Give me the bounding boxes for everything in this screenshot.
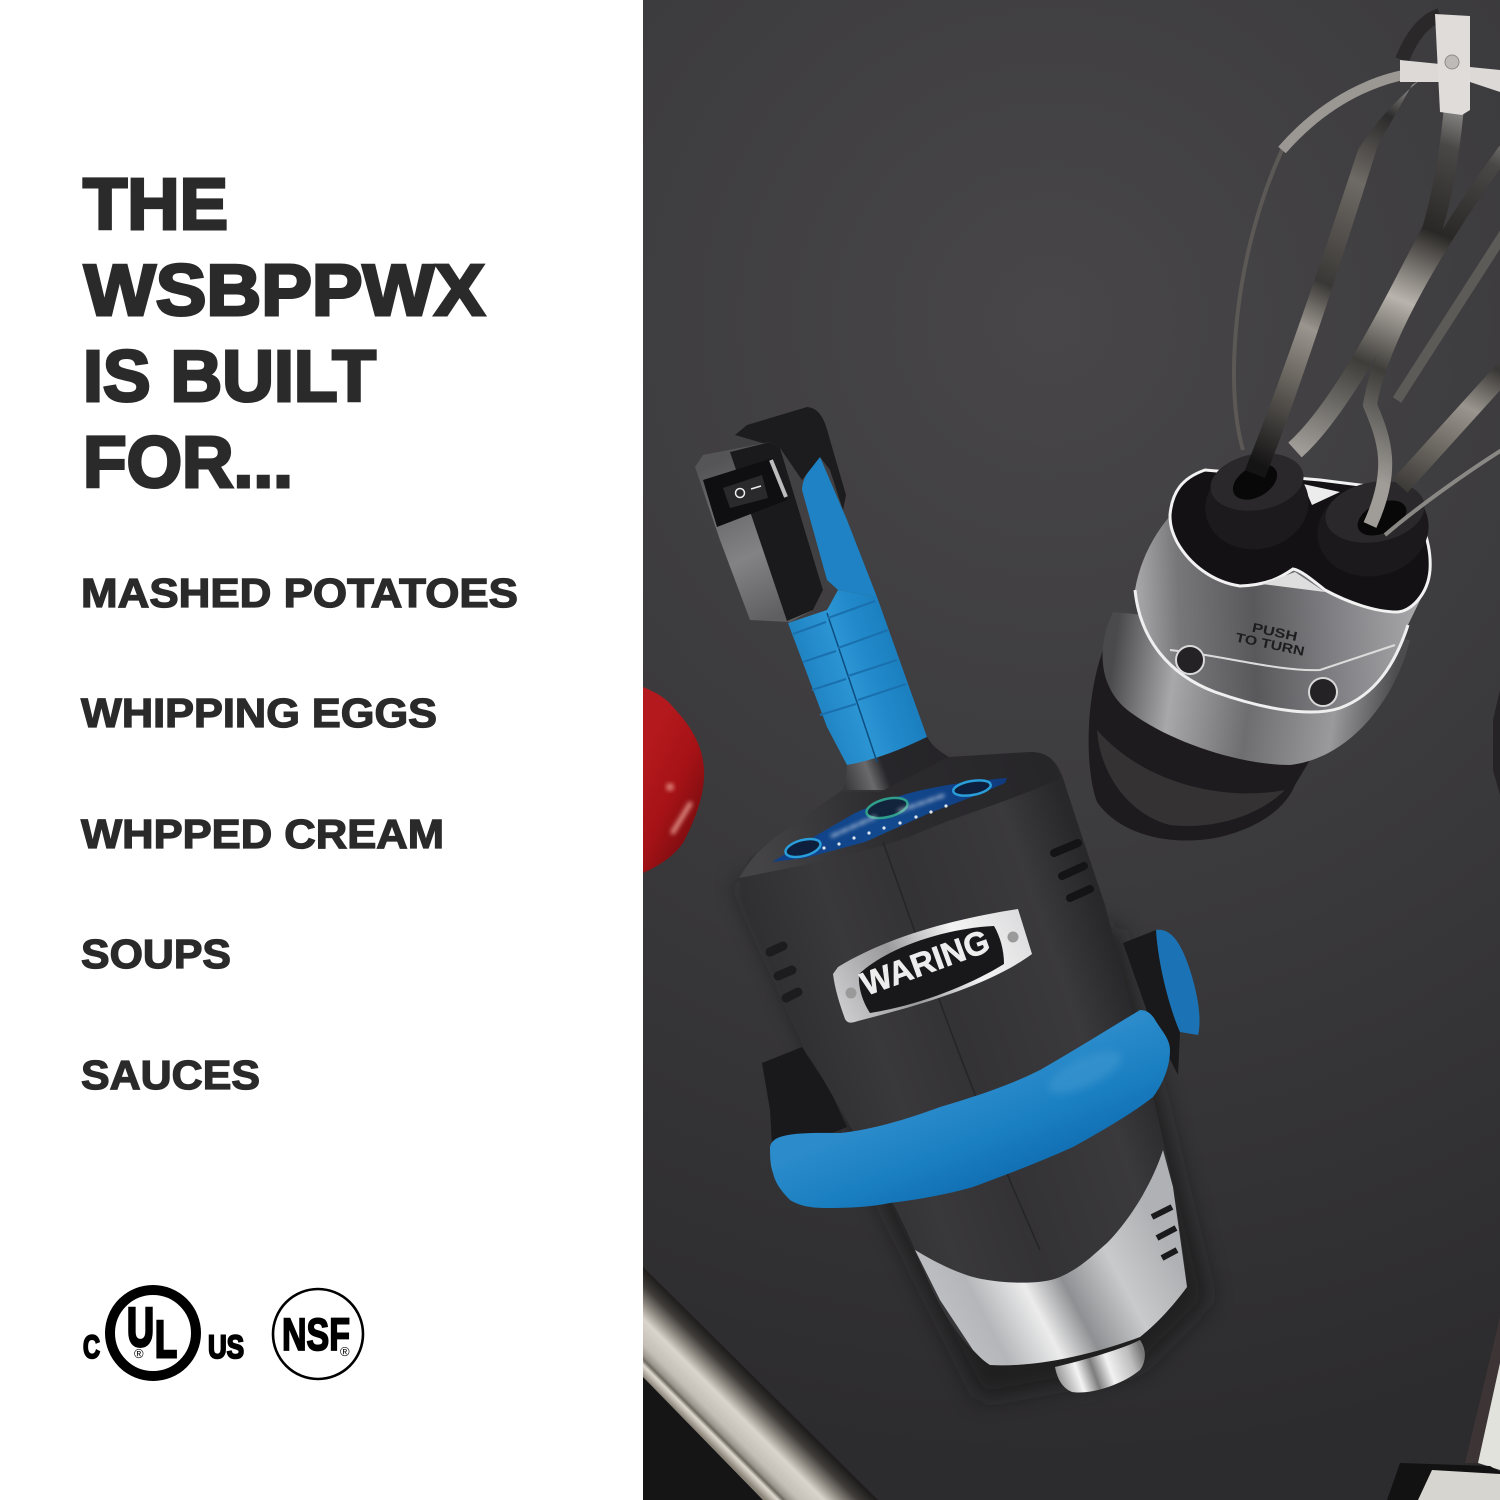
icon: cULus certification mark: U — [127, 1296, 154, 1358]
handle grip — [788, 457, 927, 765]
switch housing — [695, 442, 823, 622]
chrome ring — [1103, 612, 1410, 765]
name badge — [833, 909, 1032, 1023]
title — [83, 165, 485, 503]
list of uses: WHPPED CREAM — [81, 811, 444, 857]
control label — [772, 778, 1007, 862]
blue knob — [1156, 930, 1200, 1035]
title: IS BUILT — [83, 337, 376, 417]
icon: cULus certification mark: L — [155, 1311, 177, 1369]
title: THE — [83, 165, 228, 245]
whisk attachment — [1089, 14, 1500, 840]
bracket: left — [762, 1047, 847, 1150]
base cup — [1089, 650, 1310, 840]
icon: NSF certification mark: ® — [340, 1344, 350, 1359]
motor body — [739, 752, 1187, 1365]
panel: white text column — [0, 0, 643, 1500]
name badge: WARING — [856, 922, 994, 1003]
neck — [846, 736, 948, 790]
blender head — [695, 407, 1200, 1393]
icon: cULus certification mark — [83, 1290, 244, 1376]
metal shaft bottom right — [1387, 1317, 1500, 1500]
icon: cULus certification mark: US — [208, 1329, 244, 1365]
list of uses: SAUCES — [81, 1052, 260, 1098]
label: push to turn — [1236, 623, 1304, 656]
icon: cULus certification mark: ® — [134, 1346, 144, 1361]
blender shadow — [735, 880, 1210, 1400]
list of uses: MASHED POTATOES — [81, 570, 518, 616]
rubber ferrules — [1206, 482, 1308, 549]
label: push to turn: TO TURN — [1234, 630, 1306, 659]
whisk top hub — [1400, 14, 1500, 115]
chrome plate — [1135, 505, 1425, 712]
top face — [739, 752, 1060, 878]
dark object right edge — [1493, 690, 1500, 795]
vents: left — [770, 946, 798, 998]
label: push to turn: PUSH — [1251, 620, 1299, 644]
vents: upper right — [1054, 843, 1090, 898]
bracket: right — [1123, 930, 1180, 1075]
tomato — [643, 687, 704, 873]
list of uses: WHIPPING EGGS — [81, 690, 437, 736]
silver lower housing — [915, 1150, 1187, 1365]
title: FOR... — [83, 423, 293, 503]
rocker switch — [703, 458, 787, 527]
icon: cULus certification mark: C — [83, 1329, 100, 1365]
icon: NSF certification mark — [273, 1289, 363, 1379]
seam line — [883, 842, 1040, 1250]
panel: product photo — [643, 0, 1500, 1500]
twin socket — [1170, 470, 1430, 612]
title: WSBPPWX — [84, 251, 485, 331]
metal shaft bottom left — [643, 1267, 878, 1500]
whisk wires — [1234, 15, 1500, 535]
icon: NSF certification mark: NSF — [282, 1309, 350, 1360]
blue carry handle — [770, 1010, 1170, 1208]
collar — [1055, 1340, 1145, 1393]
back switch housing — [735, 407, 846, 510]
list of uses: SOUPS — [81, 931, 231, 977]
list of uses — [81, 570, 518, 1098]
